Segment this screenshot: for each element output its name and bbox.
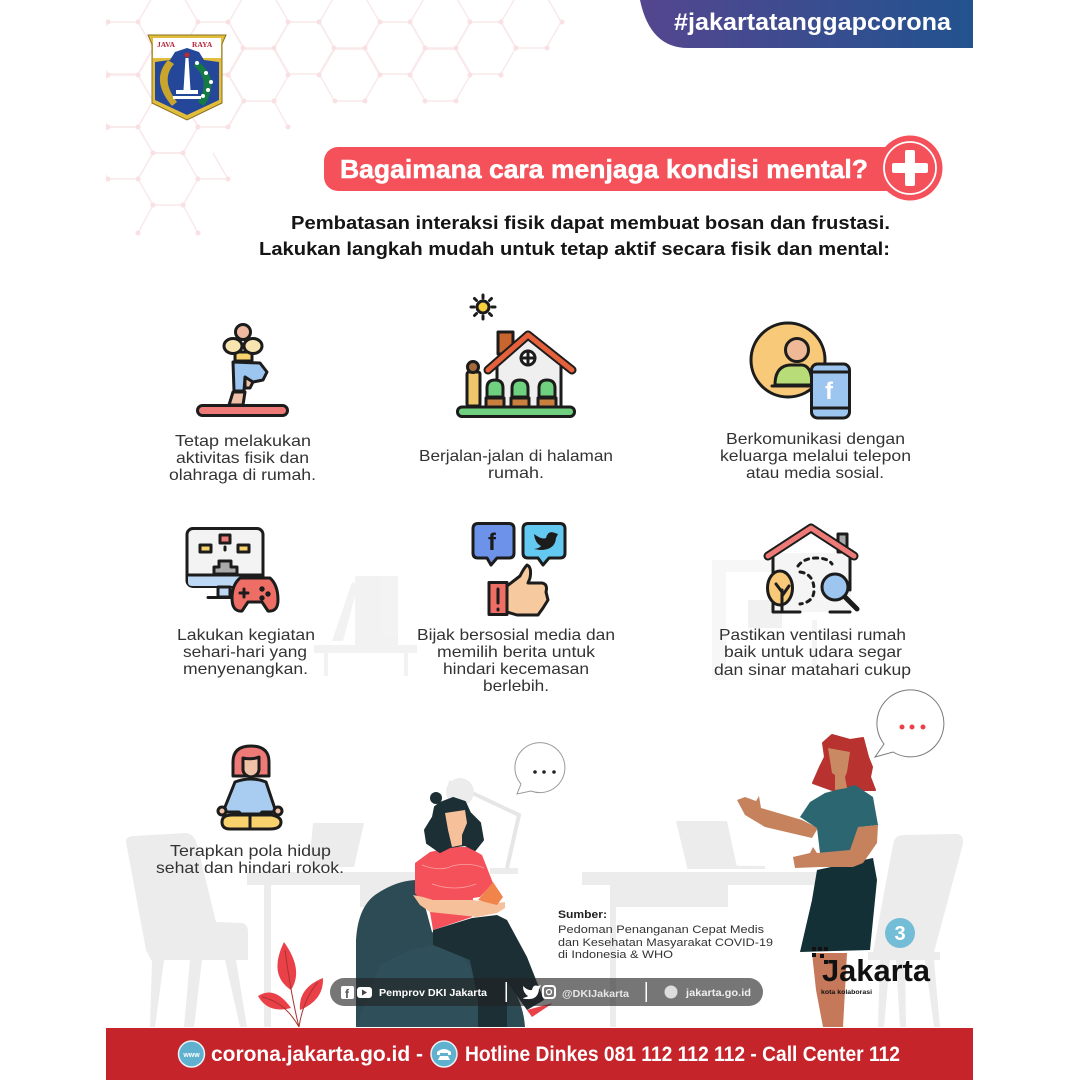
icon: house inspection (768, 528, 857, 612)
intro text: Lakukan langkah mudah untuk tetap aktif secara fisik dan mental: (259, 239, 890, 259)
source note: di Indonesia & WHO (558, 949, 674, 961)
caption: physical activity: aktivitas fisik dan (176, 450, 309, 467)
icon: meditating woman (218, 746, 282, 829)
caption: physical activity: Tetap melakukan (175, 433, 311, 450)
illustration: seated woman on beanbag (356, 792, 553, 1027)
heading pill (324, 147, 914, 191)
logo: Jakarta coat of arms: JAVA (157, 40, 176, 49)
icon: social media thumbs up (473, 524, 565, 615)
footer bar: corona.jakarta.go.id - (211, 1043, 423, 1066)
icon: website (664, 986, 678, 998)
caption: wise social media: Bijak bersosial media dan (417, 627, 615, 644)
icon: www (178, 1041, 204, 1067)
caption: communicate with family: Berkomunikasi dengan (726, 431, 905, 448)
icon: house with sun (458, 295, 574, 416)
caption: walking in the yard (419, 448, 613, 482)
heading pill: Bagaimana cara menjaga kondisi mental? (340, 154, 868, 184)
speech bubble: seated woman (515, 743, 565, 794)
speech bubble: standing woman (875, 690, 944, 757)
icon: telephone (431, 1041, 457, 1067)
caption: fun activities: sehari-hari yang (183, 644, 307, 661)
caption: walking in the yard: Berjalan-jalan di halaman (419, 448, 613, 465)
icon: plant (258, 942, 323, 1027)
background hexagon pattern (93, 0, 562, 233)
background furniture: right chair (868, 834, 963, 1027)
caption: healthy lifestyle: Terapkan pola hidup (170, 843, 331, 860)
caption: fun activities (177, 627, 315, 678)
logo: Jakarta coat of arms: RAYA (192, 40, 213, 49)
icon: plus badge (878, 136, 942, 200)
icons: facebook and youtube: f (345, 987, 350, 1001)
page number badge (885, 918, 915, 948)
icons: facebook and youtube (341, 986, 372, 1001)
hashtag tag: #jakartatanggapcorona (674, 9, 952, 36)
page number badge: 3 (894, 923, 906, 945)
caption: fun activities: Lakukan kegiatan (177, 627, 315, 644)
background furniture: right desk and laptop (582, 821, 822, 1027)
illustration: standing woman (737, 735, 878, 1027)
footer bar (106, 1028, 973, 1080)
caption: physical activity (169, 433, 316, 484)
caption: wise social media: hindari kecemasan (443, 661, 589, 678)
caption: healthy lifestyle: sehat dan hindari rokok. (156, 860, 344, 877)
background furniture: left chair (126, 833, 248, 1027)
source note: Sumber: (558, 909, 607, 921)
source note (558, 909, 773, 961)
caption: healthy lifestyle (156, 843, 344, 877)
icon: video call and phone (751, 323, 850, 418)
footer bar: Hotline Dinkes 081 112 112 112 - Call Center 112 (465, 1043, 900, 1066)
caption: ventilation: dan sinar matahari cukup (714, 662, 911, 679)
caption: fun activities: menyenangkan. (183, 661, 308, 678)
caption: communicate with family (720, 431, 911, 482)
Jakarta kota kolaborasi logo: kota kolaborasi (821, 990, 872, 996)
icon: monitor and game controller (187, 528, 278, 611)
icon: video call and phone: f (825, 378, 834, 405)
hashtag tag (640, 0, 973, 48)
icon: yoga pose (198, 324, 288, 416)
social media pill: @DKIJakarta (562, 989, 629, 1000)
caption: physical activity: olahraga di rumah. (169, 467, 316, 484)
source note: dan Kesehatan Masyarakat COVID-19 (558, 937, 773, 949)
background furniture: window frame (712, 560, 817, 680)
Jakarta kota kolaborasi logo: Jakarta (822, 953, 931, 988)
caption: ventilation: Pastikan ventilasi rumah (719, 627, 906, 644)
Jakarta kota kolaborasi logo (812, 947, 931, 996)
caption: ventilation (714, 627, 911, 679)
icons: twitter and instagram (523, 985, 555, 999)
caption: communicate with family: keluarga melalui telepon (720, 448, 911, 465)
logo: Jakarta coat of arms (148, 35, 226, 120)
icon: social media thumbs up: f (488, 529, 497, 556)
source note: Pedoman Penanganan Cepat Medis (558, 924, 765, 936)
social media pill: Pemprov DKI Jakarta (379, 988, 487, 999)
caption: communicate with family: atau media sosial. (746, 465, 884, 482)
intro text (259, 213, 890, 259)
caption: wise social media: berlebih. (483, 678, 549, 695)
caption: wise social media (417, 627, 615, 695)
icon: www: www (182, 1052, 200, 1059)
caption: walking in the yard: rumah. (488, 465, 544, 482)
background furniture: left desk, laptop and lamp (247, 778, 519, 1027)
background furniture: shelf with books (314, 576, 417, 676)
caption: ventilation: baik untuk udara segar (724, 644, 903, 661)
intro text: Pembatasan interaksi fisik dapat membuat bosan dan frustasi. (291, 213, 890, 233)
social media pill: jakarta.go.id (685, 988, 751, 999)
caption: wise social media: memilih berita untuk (437, 644, 596, 661)
social media pill (330, 978, 763, 1006)
